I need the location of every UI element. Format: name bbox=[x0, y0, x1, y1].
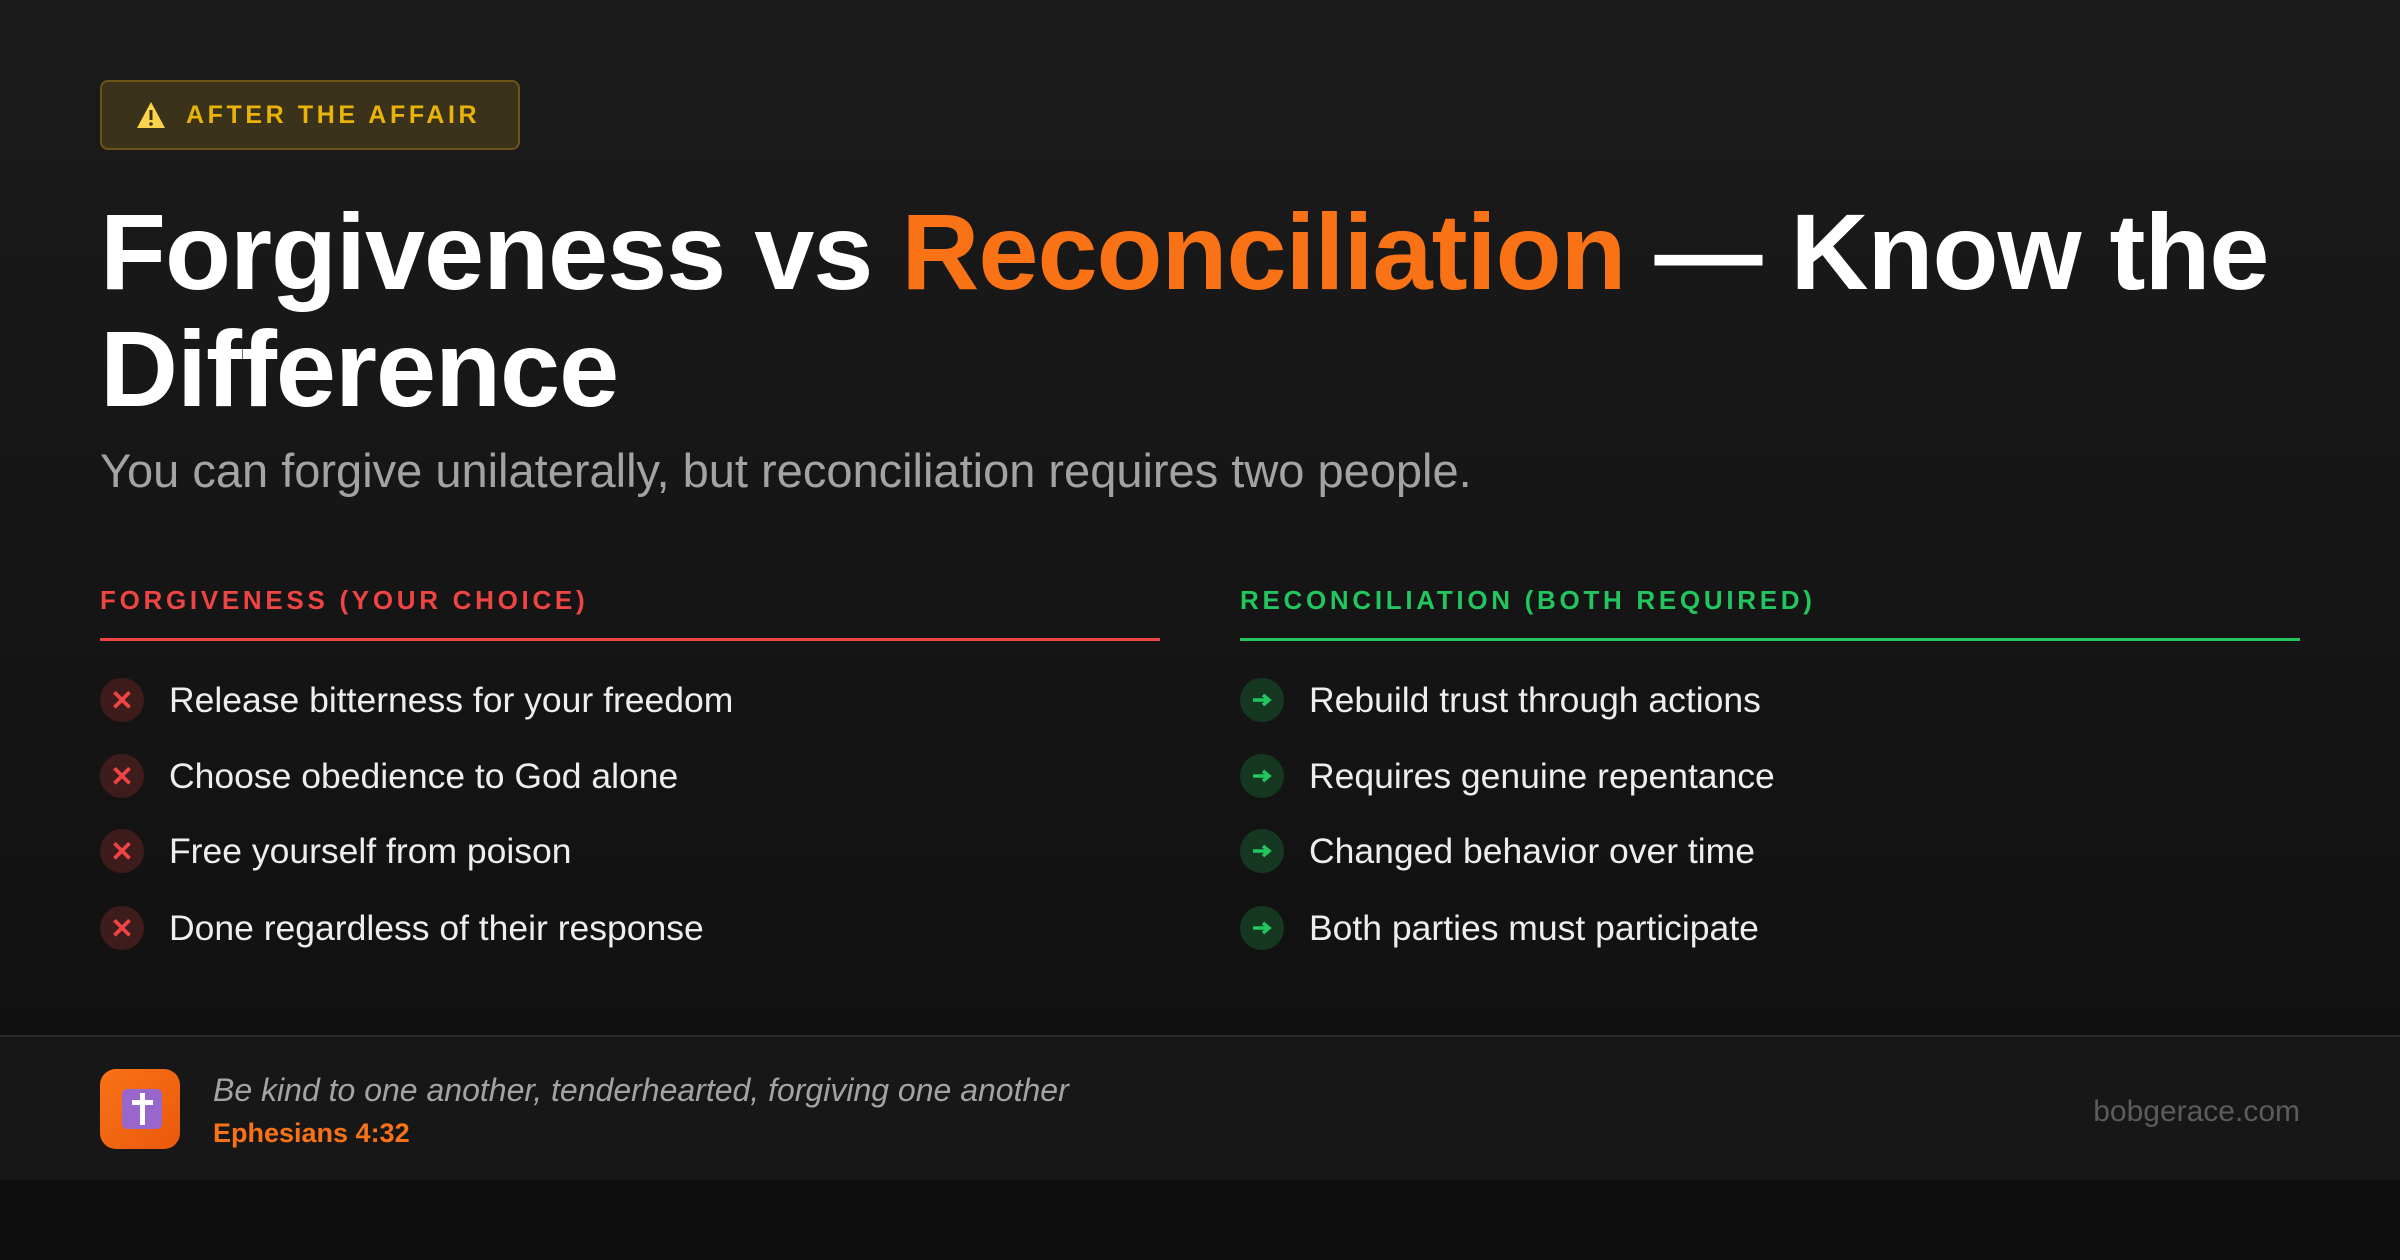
heading: forgiveness: FORGIVENESS (YOUR CHOICE) bbox=[100, 585, 588, 615]
item 4: Both parties must participate bbox=[1309, 908, 1759, 948]
heading: reconciliation bbox=[1240, 580, 2300, 641]
panel: forgiveness bbox=[100, 585, 1160, 950]
item 2: Choose obedience to God alone bbox=[169, 756, 678, 796]
title: Forgiveness vs Reconciliation — Know the Difference bbox=[100, 191, 2268, 429]
item 4: Done regardless of their response bbox=[169, 908, 704, 948]
icon: cross bbox=[100, 1069, 180, 1149]
subtitle: You can forgive unilaterally, but reconciliation requires two people. bbox=[100, 444, 1472, 497]
item 2: Requires genuine repentance bbox=[1309, 756, 1775, 796]
item 3: Changed behavior over time bbox=[1309, 830, 1755, 870]
item 1: ✕ bbox=[110, 684, 134, 716]
quote: Be kind to one another, tenderhearted, forgiving one another bbox=[213, 1072, 1069, 1108]
item 1: Rebuild trust through actions bbox=[1309, 680, 1761, 720]
item 1: Release bitterness for your freedom bbox=[169, 680, 733, 720]
item 4: ✕ bbox=[110, 912, 134, 944]
item 3: ✕ bbox=[110, 836, 134, 866]
badge: after the affair: AFTER THE AFFAIR bbox=[186, 100, 480, 128]
badge: after the affair bbox=[100, 80, 520, 150]
footer bbox=[0, 1035, 2400, 1180]
reference: Ephesians 4:32 bbox=[213, 1118, 410, 1148]
heading: reconciliation: RECONCILIATION (BOTH REQUIRED) bbox=[1240, 585, 1816, 615]
site url: bobgerace.com bbox=[2093, 1095, 2300, 1128]
panel: reconciliation bbox=[1240, 585, 2300, 950]
item 3: Free yourself from poison bbox=[169, 830, 572, 870]
heading: forgiveness bbox=[100, 580, 1160, 641]
item 2: ✕ bbox=[110, 760, 134, 792]
